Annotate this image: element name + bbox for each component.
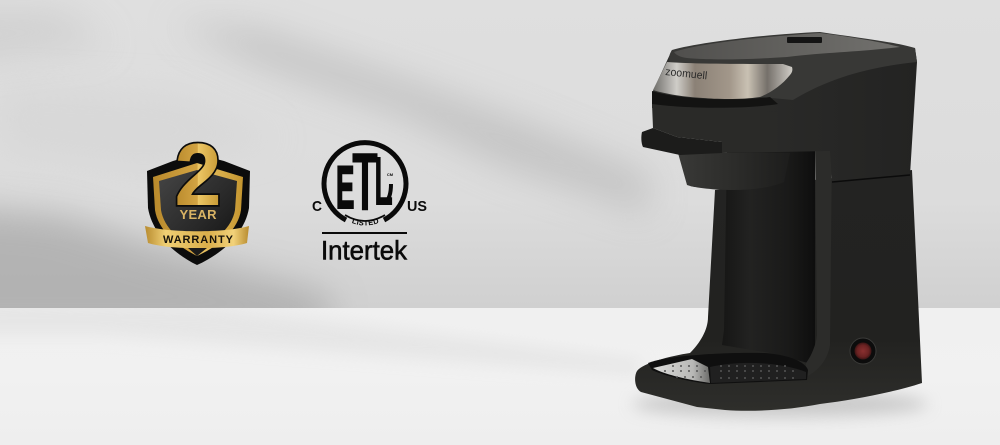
LISTED arc band: LISTED bbox=[352, 218, 378, 226]
badge YEAR text: YEAR bbox=[180, 207, 217, 222]
tray perforations bbox=[664, 366, 796, 378]
drip tray bbox=[648, 353, 808, 384]
badge shield bbox=[147, 154, 250, 265]
lower body and base bbox=[635, 170, 922, 411]
ribbon WARRANTY text: WARRANTY bbox=[163, 234, 234, 246]
letter C: C bbox=[312, 198, 322, 215]
pod holder cup bbox=[678, 153, 790, 190]
upper housing bbox=[652, 48, 917, 182]
floor shadow bbox=[632, 391, 928, 417]
holder handle bbox=[641, 128, 722, 155]
L curved foot bbox=[385, 184, 391, 203]
divider line bbox=[322, 232, 407, 234]
head side panel bbox=[652, 104, 777, 153]
ETL Intertek certification mark bbox=[312, 136, 427, 266]
base step line bbox=[832, 175, 910, 182]
central column bbox=[722, 148, 815, 363]
letter T: T bbox=[352, 136, 378, 228]
warranty badge bbox=[145, 125, 250, 265]
ETL ring bbox=[324, 143, 406, 220]
brand name on band: zoomuell bbox=[665, 66, 708, 82]
power button bbox=[850, 338, 876, 364]
lid top bbox=[669, 32, 917, 100]
letter L: L bbox=[374, 143, 393, 220]
lid latch bbox=[787, 37, 822, 43]
letter E: E bbox=[336, 154, 354, 221]
tray grate bbox=[653, 359, 710, 383]
background: wall bbox=[0, 18, 1000, 308]
badge numeral 2: 2 bbox=[174, 125, 222, 224]
CM mark: CM bbox=[387, 172, 394, 177]
head rim bbox=[652, 91, 778, 108]
background: floor bbox=[0, 300, 1000, 445]
letters US: US bbox=[407, 198, 427, 215]
ribbon chevron bbox=[188, 248, 207, 256]
steel band bbox=[653, 62, 792, 99]
coffee maker bbox=[632, 32, 928, 417]
right column trim bbox=[806, 148, 832, 377]
Intertek wordmark: Intertek bbox=[321, 236, 407, 266]
